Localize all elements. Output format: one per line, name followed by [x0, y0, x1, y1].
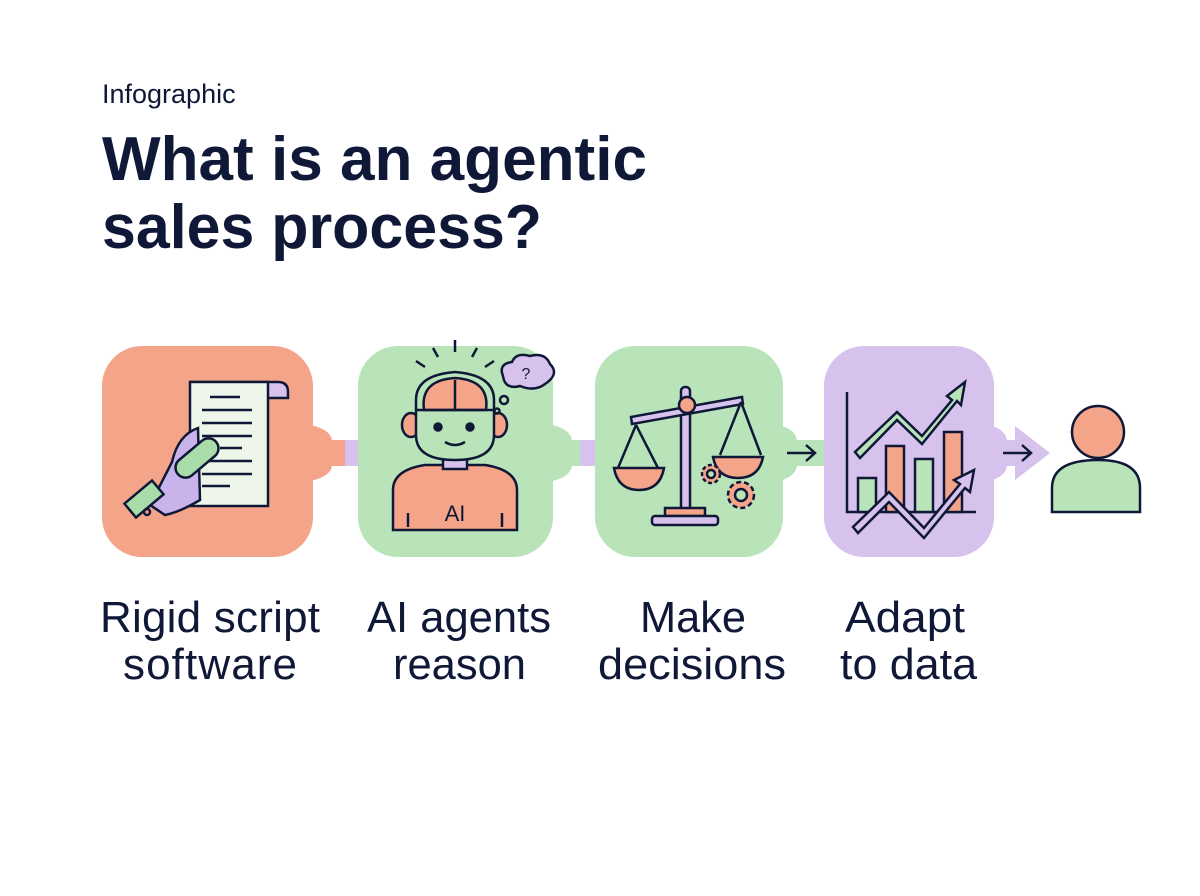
title	[102, 125, 647, 262]
panel: AI agents reason: ?	[522, 366, 531, 383]
label: AI agents reason: AI agents	[367, 593, 551, 642]
icon: balance scale with gears	[614, 387, 763, 525]
label: rigid script software: software	[123, 640, 297, 689]
title: What is an agentic	[102, 125, 647, 194]
icon: AI robot with brain	[393, 340, 554, 530]
label: rigid script software: Rigid script	[100, 593, 320, 642]
label: make decisions	[598, 593, 786, 689]
label: AI agents reason	[367, 593, 551, 689]
panel: adapt to data	[824, 346, 994, 557]
icon: rising chart	[847, 382, 976, 538]
icon: customer person	[1052, 406, 1140, 512]
panel: AI agents reason: AI	[445, 501, 465, 526]
label: adapt to data: Adapt	[845, 593, 965, 642]
icon: script document	[124, 382, 288, 517]
kicker label: Infographic	[102, 79, 236, 109]
panel: AI agents reason	[358, 340, 554, 557]
connectors	[300, 424, 1050, 482]
label: adapt to data: to data	[840, 640, 978, 689]
label: rigid script software	[100, 593, 320, 689]
label: make decisions: decisions	[598, 640, 786, 689]
arrow 4 to person	[1003, 445, 1031, 461]
label: adapt to data	[840, 593, 978, 689]
arrow 3 to 4	[787, 445, 815, 461]
title: sales process?	[102, 193, 542, 262]
label: AI agents reason: reason	[393, 640, 526, 689]
label: make decisions: Make	[640, 593, 746, 642]
panel: make decisions	[595, 346, 783, 557]
panel: rigid script software	[102, 346, 313, 557]
